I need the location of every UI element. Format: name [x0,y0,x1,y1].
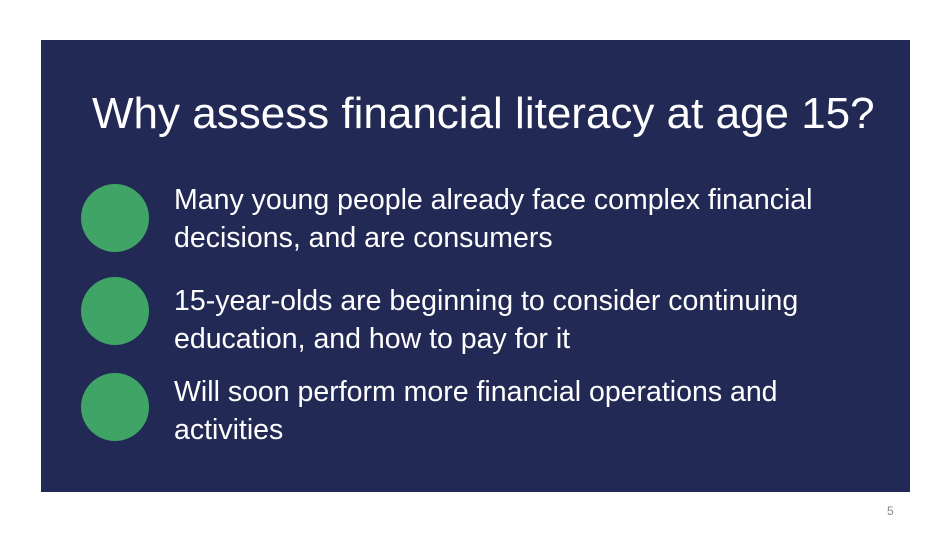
text block: point 2 [174,285,798,355]
text block: point 1: decisions, and are consumers [174,222,553,254]
text block: point 3 [174,376,778,446]
icon: bullet circle 2 [81,277,149,345]
panel: main slide [41,40,910,492]
icon: bullet circle 1 [81,184,149,252]
text block: point 1 [174,184,812,254]
text block: point 1: Many young people already face complex financial [174,184,812,216]
page number: 5 [887,504,894,518]
text block: point 2: education, and how to pay for it [174,323,570,355]
title: Why assess financial literacy at age 15? [92,89,875,138]
text block: point 2: 15-year-olds are beginning to consider continuing [174,285,798,317]
text block: point 3: Will soon perform more financial operations and [174,376,778,408]
text block: point 3: activities [174,414,283,446]
icon: bullet circle 3 [81,373,149,441]
